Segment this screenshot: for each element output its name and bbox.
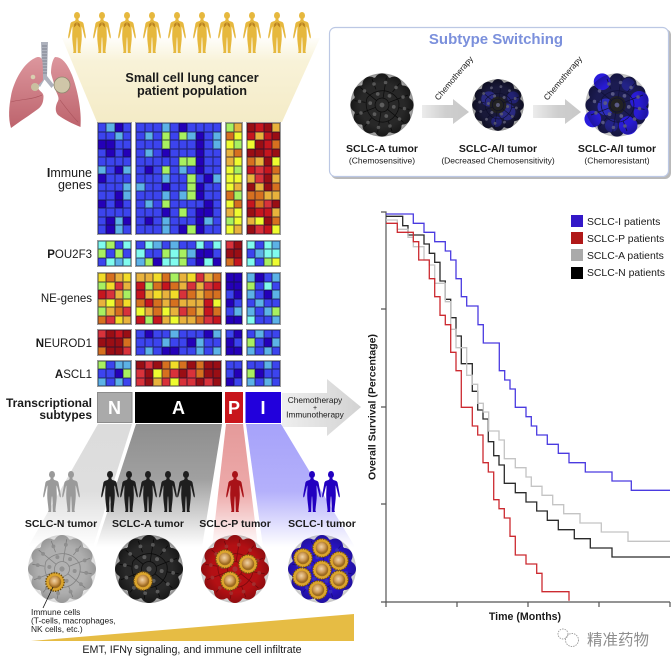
callout: immune cells: (T-cells, macrophages, xyxy=(31,616,116,626)
heatmap: POU2F3 A xyxy=(135,240,222,267)
heatmap: ASCL1 I xyxy=(246,360,281,387)
label: SCLC-P tumor: SCLC-P tumor xyxy=(199,518,271,530)
label: SCLC-A/I tumor decreased chemosensitivity: (Decreased Chemosensitivity) xyxy=(441,156,555,166)
heatmap: ASCL1 N xyxy=(97,360,132,387)
beam: subtype A xyxy=(96,424,222,547)
heatmap: NE-genes N xyxy=(97,272,132,325)
label: transcriptional subtypes: Transcriptional xyxy=(6,396,92,410)
label: immune genes: Immune xyxy=(47,166,92,180)
heatmap: NE-genes A xyxy=(135,272,222,325)
arrow: chemotherapy + immunotherapy: Chemotherapy xyxy=(288,395,343,405)
beam: subtype P xyxy=(212,424,258,547)
heatmap: immune genes P xyxy=(225,122,243,235)
heatmap: immune genes A xyxy=(135,122,222,235)
label: ASCL1: ASCL1 xyxy=(55,369,92,381)
figures: SCLC-A patients xyxy=(101,471,195,512)
figures: SCLC-N patients xyxy=(43,471,80,512)
tumor: chemoresistant xyxy=(584,73,649,137)
heatmap: ASCL1 P xyxy=(225,360,243,387)
tumor: SCLC-N xyxy=(28,535,96,603)
figures: SCLC-I patients xyxy=(303,471,340,512)
subtype box I: I xyxy=(260,398,266,418)
y axis label: Overall Survival (Percentage) xyxy=(366,334,378,480)
subtype box P xyxy=(225,392,243,423)
arrow: chemotherapy 1 xyxy=(422,53,476,124)
subtype box P: P xyxy=(228,398,240,418)
legend: SCLC-I patients xyxy=(587,217,660,228)
callout: immune cells xyxy=(31,587,116,634)
arrow: chemotherapy 1: Chemotherapy xyxy=(432,53,476,102)
heatmap: NEUROD1 P xyxy=(225,329,243,356)
legend: SCLC-P patients xyxy=(587,234,664,245)
tumor: chemosensitive xyxy=(350,73,414,137)
label: SCLC-A/I tumor decreased chemosensitivity: SCLC-A/I tumor xyxy=(459,143,537,155)
label: SCLC-A tumor chemosensitive: (Chemosensitive) xyxy=(349,156,415,166)
icon: lungs with tumors xyxy=(9,42,81,128)
subtype box A: A xyxy=(172,398,185,418)
heatmap: immune genes N xyxy=(97,122,132,235)
curve: SCLC-P patients xyxy=(386,223,569,601)
curve: SCLC-I patients xyxy=(386,214,670,490)
subtype box I xyxy=(246,392,281,423)
heatmap: NEUROD1 I xyxy=(246,329,281,356)
x axis label: Time (Months) xyxy=(489,611,561,623)
chart: overall survival xyxy=(366,212,670,623)
figures: SCLC-P patients xyxy=(226,471,244,512)
beam: subtype N xyxy=(28,424,132,547)
panel: subtype switching xyxy=(330,28,671,179)
label: SCLC-A/I tumor chemoresistant: SCLC-A/I tumor xyxy=(578,143,656,155)
heatmap: POU2F3 P xyxy=(225,240,243,267)
callout: immune cells: NK cells, etc.) xyxy=(31,624,83,634)
tumor: decreased chemosensitivity xyxy=(472,79,524,131)
heatmap: ASCL1 A xyxy=(135,360,222,387)
patient population figures xyxy=(68,12,311,53)
heatmap: NEUROD1 A xyxy=(135,329,222,356)
arrow: chemotherapy 2 xyxy=(533,53,585,124)
label: SCLC-A/I tumor decreased chemosensitivity xyxy=(441,143,555,166)
watermark xyxy=(558,629,649,649)
beam: subtype I xyxy=(246,424,355,547)
watermark: 精准药物 xyxy=(587,631,649,649)
legend: SCLC-N patients xyxy=(587,268,665,279)
subtype box A xyxy=(135,392,222,423)
label: immune genes: genes xyxy=(58,178,92,192)
legend: SCLC-A patients xyxy=(587,251,664,262)
heatmap: immune genes I xyxy=(246,122,281,235)
tumor: SCLC-I xyxy=(288,535,356,603)
label: SCLC-A/I tumor chemoresistant: (Chemoresistant) xyxy=(584,156,650,166)
label: NE-genes: NE-genes xyxy=(41,293,92,305)
wedge: infiltrate gradient xyxy=(31,614,354,641)
label: SCLC-I tumor: SCLC-I tumor xyxy=(288,518,356,530)
top beam: patient population funnel xyxy=(62,38,320,122)
heatmap: NE-genes I xyxy=(246,272,281,325)
label: NEUROD1: NEUROD1 xyxy=(36,338,92,350)
callout: immune cells: Immune cells xyxy=(31,607,80,617)
heatmap: POU2F3 N xyxy=(97,240,132,267)
label: SCLC-A/I tumor chemoresistant xyxy=(578,143,656,166)
tumor: SCLC-A xyxy=(115,535,183,603)
caption: EMT, IFNy signaling: EMT, IFNγ signaling, and immune cell infiltrate xyxy=(82,644,302,656)
curve: SCLC-N patients xyxy=(386,216,670,557)
tumor: SCLC-P xyxy=(201,535,269,603)
heatmap: POU2F3 I xyxy=(246,240,281,267)
heatmap: NEUROD1 N xyxy=(97,329,132,356)
label: SCLC-N tumor: SCLC-N tumor xyxy=(25,518,97,530)
heatmap xyxy=(97,122,281,387)
title: patient population: patient population xyxy=(137,84,247,98)
arrow: chemotherapy + immunotherapy xyxy=(282,379,361,436)
panel heading: Subtype Switching xyxy=(429,31,563,48)
label: SCLC-A tumor chemosensitive xyxy=(346,143,418,166)
arrow: chemotherapy 2: Chemotherapy xyxy=(541,53,585,102)
label: SCLC-A tumor chemosensitive: SCLC-A tumor xyxy=(346,143,418,155)
chart axes xyxy=(381,212,670,607)
label: transcriptional subtypes: subtypes xyxy=(39,408,92,422)
curve: SCLC-A patients xyxy=(386,220,670,541)
arrow: chemotherapy + immunotherapy: Immunotherapy xyxy=(286,410,345,420)
subtype box N: N xyxy=(108,398,121,418)
label: POU2F3: POU2F3 xyxy=(47,249,92,261)
label: SCLC-A tumor: SCLC-A tumor xyxy=(112,518,184,530)
subtype box N xyxy=(98,392,132,422)
heatmap: NE-genes P xyxy=(225,272,243,325)
legend xyxy=(571,215,665,279)
arrow: chemotherapy + immunotherapy: + xyxy=(313,405,317,412)
title: patient population: Small cell lung cancer xyxy=(125,71,259,85)
